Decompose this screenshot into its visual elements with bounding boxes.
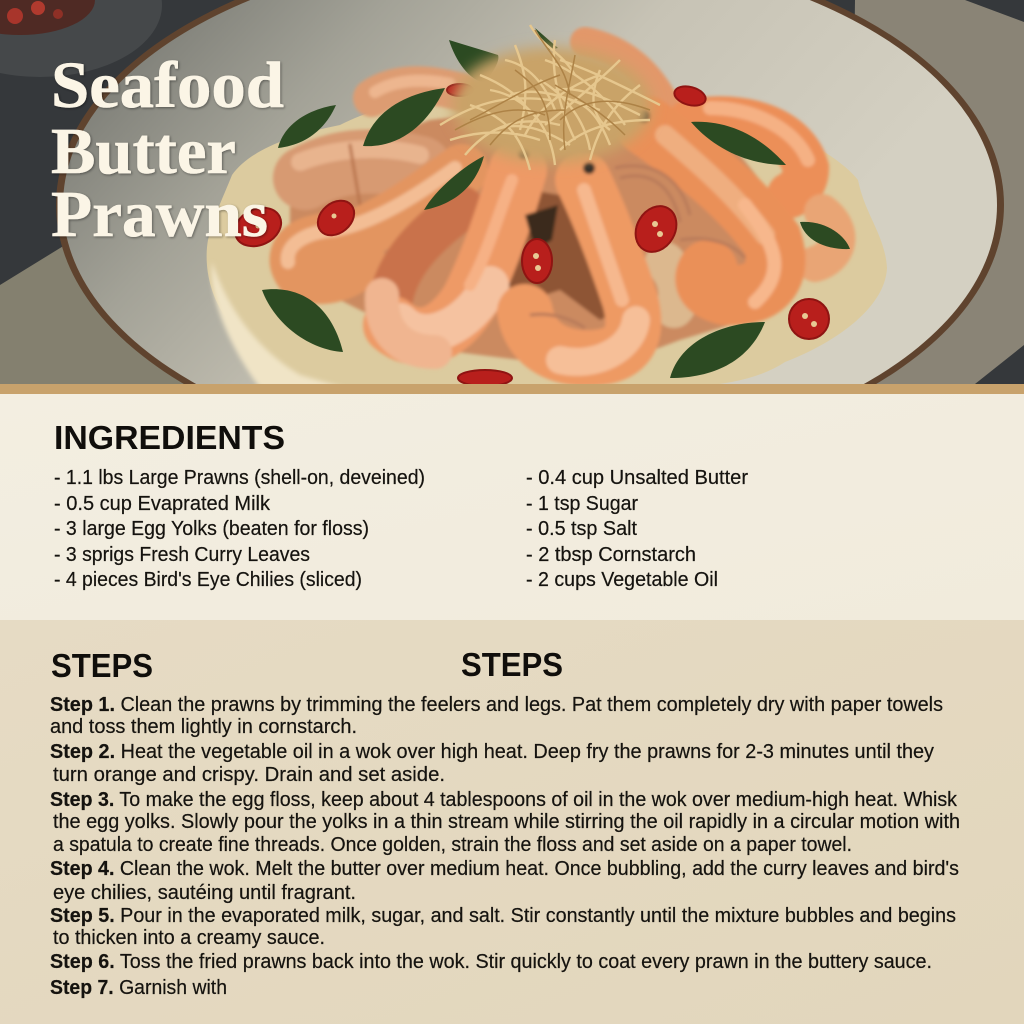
chili seeds	[256, 214, 817, 327]
prawn: far right	[815, 212, 837, 264]
ingredients list: left column: - 4 pieces Bird's Eye Chilies (sliced)	[54, 569, 362, 591]
title	[51, 49, 284, 251]
hero photo: plated butter prawns	[0, 0, 1024, 384]
plate	[56, 0, 1004, 384]
ingredients list: left column: - 3 large Egg Yolks (beaten for floss)	[54, 518, 369, 540]
prawn: upper left	[300, 145, 420, 205]
step 4: eye chilies, sautéing until fragrant.	[53, 882, 356, 904]
title: Butter	[51, 115, 236, 188]
prawn: center piece	[665, 262, 678, 308]
step 5: to thicken into a creamy sauce.	[53, 927, 325, 949]
ingredients list: right column: - 0.4 cup Unsalted Butter	[526, 467, 748, 489]
step 6: Step 6. Toss the fried prawns back into the wok. Stir quickly to coat every prawn in the buttery sauce.	[50, 951, 932, 973]
heading: steps left: STEPS	[51, 647, 153, 684]
prawn: left	[288, 168, 462, 278]
ingredients list: left column: - 3 sprigs Fresh Curry Leaves	[54, 544, 310, 566]
title: Prawns	[51, 178, 268, 251]
side bowl with chilies	[0, 0, 162, 77]
prawn heads	[518, 109, 650, 174]
gold divider band	[0, 384, 1024, 394]
step 2	[50, 741, 934, 786]
napkin: right	[850, 0, 1024, 384]
ingredients list: right column: - 2 cups Vegetable Oil	[526, 569, 718, 591]
ingredients list: right column: - 0.5 tsp Salt	[526, 518, 637, 540]
food: prawns	[288, 42, 837, 370]
step 3	[50, 789, 960, 856]
step 1	[50, 694, 943, 738]
cream sauce	[207, 83, 887, 388]
ingredients list: right column: - 1 tsp Sugar	[526, 493, 638, 515]
napkin: left	[0, 245, 200, 384]
prawn legs	[530, 166, 745, 328]
prawn: front right	[645, 125, 775, 302]
heading: steps right: STEPS	[461, 646, 563, 683]
prawn: upper right	[690, 108, 808, 195]
step 2: Step 2. Heat the vegetable oil in a wok over high heat. Deep fry the prawns for 2-3 minutes until they	[50, 741, 934, 763]
ingredients list: right column: - 2 tbsp Cornstarch	[526, 544, 696, 566]
step 4	[50, 858, 959, 904]
step 5: Step 5. Pour in the evaporated milk, sugar, and salt. Stir constantly until the mixture bubbles and begins	[50, 905, 956, 927]
panel: steps	[0, 620, 1024, 1024]
step 3: Step 3. To make the egg floss, keep about 4 tablespoons of oil in the wok over medium-high heat. Whisk	[50, 789, 958, 811]
title: Seafood	[51, 49, 284, 122]
dark table background	[0, 0, 1024, 384]
prawn: front left	[382, 170, 518, 352]
step 4: Step 4. Clean the wok. Melt the butter over medium heat. Once bubbling, add the curry leaves and bird's	[50, 858, 959, 880]
ingredients list: left column: - 1.1 lbs Large Prawns (shell-on, deveined)	[54, 467, 425, 489]
egg floss garnish	[440, 25, 660, 170]
dark gap between front prawns	[508, 191, 606, 321]
shadow mass beneath prawns	[288, 116, 756, 361]
ingredients list: left column: - 0.5 cup Evaprated Milk	[54, 493, 271, 515]
step 1: and toss them lightly in cornstarch.	[50, 716, 357, 738]
curry leaves	[262, 28, 850, 378]
step 3: a spatula to create fine threads. Once golden, strain the floss and set aside on a paper towel.	[53, 834, 852, 856]
step 3: the egg yolks. Slowly pour the yolks in a thin stream while stirring the oil rapidly in a circular motion with	[53, 811, 960, 833]
panel: ingredients	[0, 394, 1024, 620]
ingredients list: right column	[526, 467, 748, 591]
step 7: Step 7. Garnish with	[50, 977, 227, 999]
step 1: Step 1. Clean the prawns by trimming the feelers and legs. Pat them completely dry with paper towels	[50, 694, 943, 716]
ingredients list: left column	[54, 467, 425, 591]
step 2: turn orange and crispy. Drain and set aside.	[53, 764, 445, 786]
dark gaps between prawns	[525, 205, 558, 250]
prawn: back top	[372, 42, 665, 105]
chili slices	[229, 83, 829, 386]
heading: ingredients: INGREDIENTS	[54, 419, 285, 456]
step 5	[50, 905, 956, 949]
prawn: front center	[525, 180, 636, 362]
